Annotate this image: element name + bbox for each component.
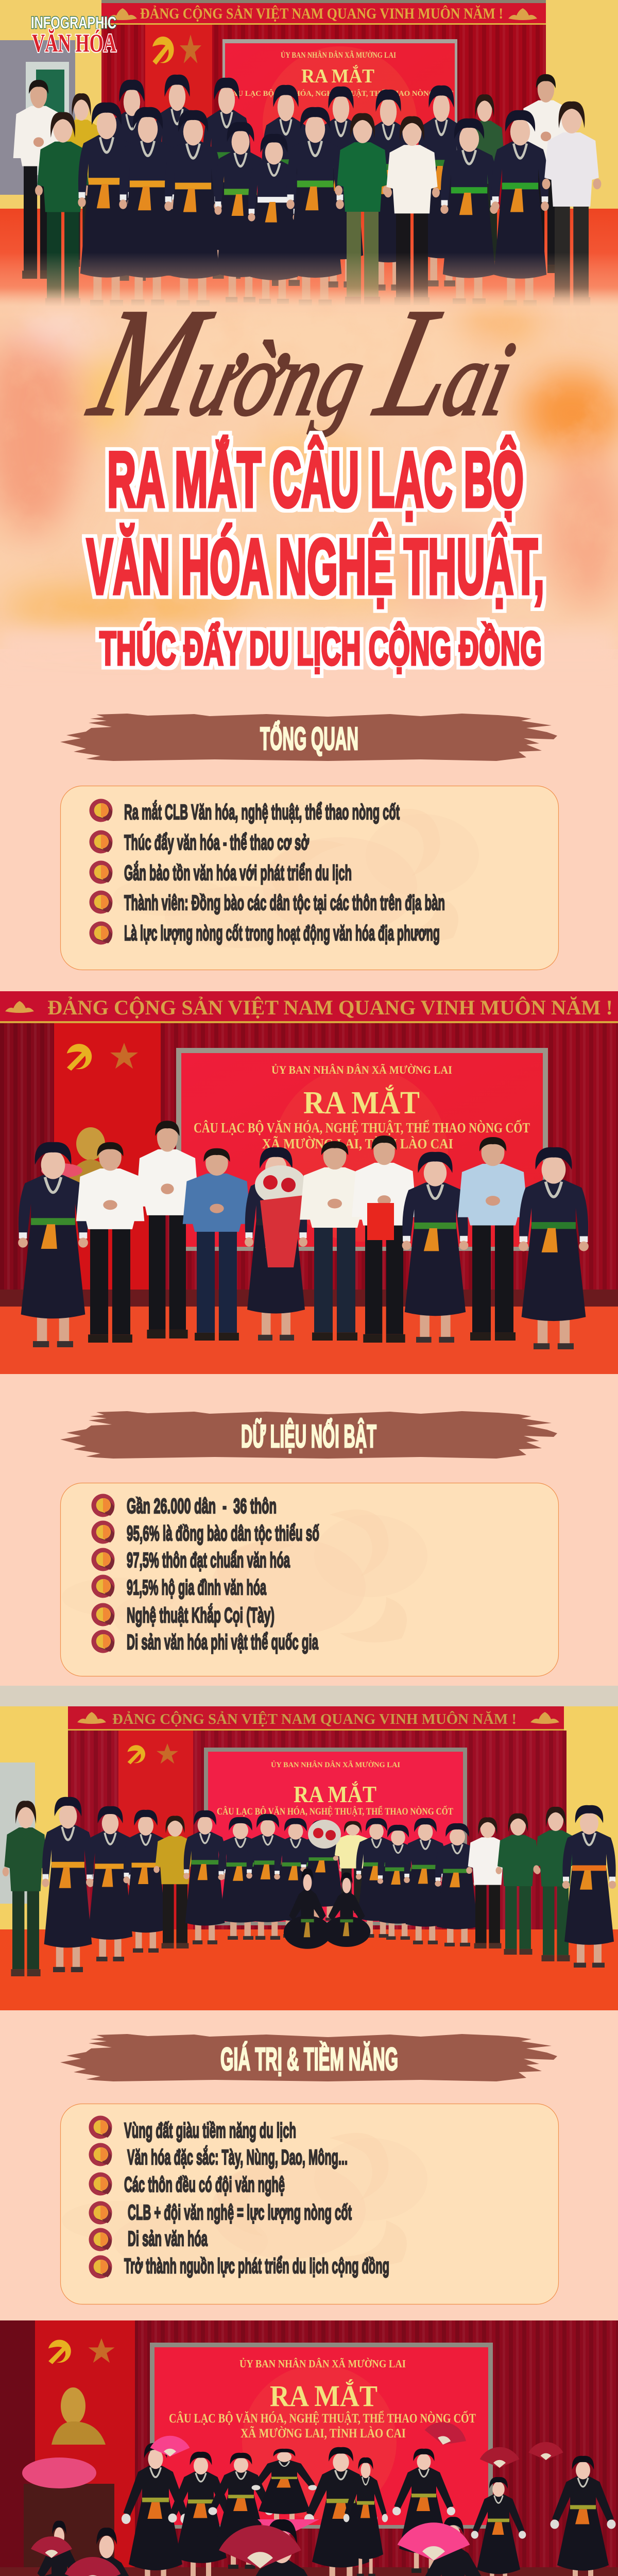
red folder [367, 1203, 394, 1240]
item 2: Văn hóa đặc sắc: Tày, Nùng, Dao, Mông... [127, 2145, 348, 2169]
projection screen [150, 2343, 493, 2529]
panel: highlights card [61, 1483, 558, 1676]
window at left [0, 40, 75, 195]
projection screen: ỦY BAN NHÂN DÂN XÃ MƯỜNG LAI [271, 1760, 400, 1769]
banner [68, 1706, 564, 1731]
heading brush: Tổng quan: TỔNG QUAN [260, 721, 358, 757]
panel: overview card [61, 786, 558, 970]
photo fade into watercolour [0, 252, 618, 319]
item 1 [90, 799, 400, 824]
projection screen: CÂU LẠC BỘ VĂN HÓA, NGHỆ THUẬT, THỂ THAO NÒNG CỐT [227, 89, 453, 98]
logo: Infographic Văn Hóa: INFOGRAPHIC [31, 13, 116, 32]
item 3 [90, 860, 352, 885]
projection screen: RA MẮT [303, 1085, 420, 1121]
projection screen: CÂU LẠC BỘ VĂN HÓA, NGHỆ THUẬT, THỂ THAO NÒNG CỐT [217, 1806, 453, 1817]
item 5: Nghệ thuật Khắp Cọi (Tày) [127, 1603, 274, 1627]
item 5 [92, 1603, 274, 1627]
projection screen: CÂU LẠC BỘ VĂN HÓA, NGHỆ THUẬT, THỂ THAO NÒNG CỐT [194, 1120, 530, 1136]
icon: star [89, 2338, 114, 2363]
people group [3, 1797, 616, 1976]
item 1: Gần 26.000 dân - 36 thôn [127, 1494, 277, 1518]
item 1 [89, 2115, 296, 2142]
projection screen: ỦY BAN NHÂN DÂN XÃ MƯỜNG LAI [271, 1063, 452, 1076]
watercolour background [0, 289, 618, 666]
photo: club members group [0, 1686, 618, 2010]
banner: ĐẢNG CỘNG SẢN VIỆT NAM QUANG VINH MUÔN NĂM ! [140, 5, 503, 22]
item 5: Di sản văn hóa [128, 2227, 208, 2250]
section: Dữ liệu nổi bật [60, 1411, 558, 1676]
item 6: Trở thành nguồn lực phát triển du lịch cộng đồng [124, 2254, 389, 2278]
item 4: CLB + đội văn nghệ = lực lượng nòng cốt [128, 2200, 352, 2224]
icon: star [110, 1043, 138, 1069]
projection screen: RA MẮT [301, 65, 374, 87]
title script: Mường Lai: Mường Lai [76, 277, 536, 448]
photo: fan dance performance [0, 2320, 618, 2576]
item 6 [92, 1630, 319, 1654]
item 4: 91,5% hộ gia đình văn hóa [127, 1575, 267, 1599]
icon: star [157, 1743, 178, 1764]
heading brush: Giá trị & tiềm năng: GIÁ TRỊ & TIỀM NĂNG [220, 2042, 398, 2077]
icon: hammer and sickle [47, 2335, 75, 2365]
item 4 [92, 1574, 267, 1599]
banner: ĐẢNG CỘNG SẢN VIỆT NAM QUANG VINH MUÔN NĂM ! [47, 996, 613, 1019]
hero photo: group portrait with dancers [0, 0, 618, 319]
standing dancers [122, 2417, 615, 2576]
item 2 [92, 1521, 319, 1545]
banner [101, 3, 546, 25]
item 1: Vùng đất giàu tiềm năng du lịch [124, 2119, 296, 2142]
projection screen [204, 1748, 467, 1925]
item 2 [89, 2143, 348, 2169]
photo: handing over the decision [0, 991, 618, 1374]
panel: value and potential card [61, 2104, 558, 2304]
logo: Infographic Văn Hóa [31, 13, 116, 57]
bust, flowers and podium [22, 2387, 114, 2567]
logo: Infographic Văn Hóa: VĂN HÓA [32, 28, 116, 57]
bouquet [255, 1165, 306, 1267]
heading brush: Giá trị & tiềm năng [60, 2034, 557, 2081]
window [0, 1762, 35, 1904]
banner: ĐẢNG CỘNG SẢN VIỆT NAM QUANG VINH MUÔN NĂM ! [112, 1710, 517, 1727]
item 5 [89, 2227, 208, 2251]
projection screen: CÂU LẠC BỘ VĂN HÓA, NGHỆ THUẬT, THỂ THAO NÒNG CỐT [169, 2411, 476, 2426]
projection screen: ỦY BAN NHÂN DÂN XÃ MƯỜNG LAI [239, 2358, 406, 2370]
projection screen: ỦY BAN NHÂN DÂN XÃ MƯỜNG LAI [281, 50, 396, 60]
projection screen [176, 1048, 548, 1251]
section: Giá trị và tiềm năng [60, 2034, 558, 2304]
heading brush: Tổng quan [60, 714, 557, 761]
bust and flowers [41, 1127, 114, 1185]
item 3 [89, 2172, 285, 2196]
item 4 [89, 2200, 352, 2225]
section: Tổng quan [60, 714, 558, 970]
heading brush: Dữ liệu nổi bật: DỮ LIỆU NỔI BẬT [241, 1418, 376, 1454]
item 6 [89, 2254, 389, 2278]
item 6: Di sản văn hóa phi vật thể quốc gia [127, 1630, 319, 1654]
item 2: 95,6% là đồng bào dân tộc thiểu số [127, 1521, 319, 1545]
icon: star [180, 35, 201, 63]
projection screen: XÃ MƯỜNG LAI, TỈNH LÀO CAI [241, 2426, 406, 2441]
people group [18, 1121, 589, 1349]
item 2: Thúc đẩy văn hóa - thể thao cơ sở [124, 831, 309, 854]
item 4 [90, 890, 445, 914]
item 2 [90, 831, 309, 854]
item 5 [90, 921, 440, 945]
item 3: 97,5% thôn đạt chuẩn văn hóa [127, 1548, 290, 1572]
item 3 [92, 1548, 290, 1572]
people group [13, 74, 601, 306]
projection screen [222, 39, 457, 209]
item 3: Các thôn đều có đội văn nghệ [124, 2173, 285, 2196]
bouquet [308, 1820, 341, 1849]
title [76, 277, 544, 675]
icon: hammer and sickle [126, 1742, 148, 1765]
icon: hammer and sickle [151, 31, 178, 66]
item 1 [92, 1494, 277, 1518]
projection screen: XÃ MƯỜNG LAI, TỈNH LÀO CAI [262, 1136, 453, 1151]
item 3: Gắn bảo tồn văn hóa với phát triển du lịch [124, 861, 352, 885]
banner [0, 991, 618, 1023]
projection screen: RA MẮT [294, 1781, 376, 1807]
heading brush: Dữ liệu nổi bật [60, 1411, 557, 1459]
projection screen: RA MẮT [270, 2379, 377, 2413]
seated dancers with fans [31, 2517, 495, 2576]
icon: hammer and sickle [65, 1039, 96, 1072]
